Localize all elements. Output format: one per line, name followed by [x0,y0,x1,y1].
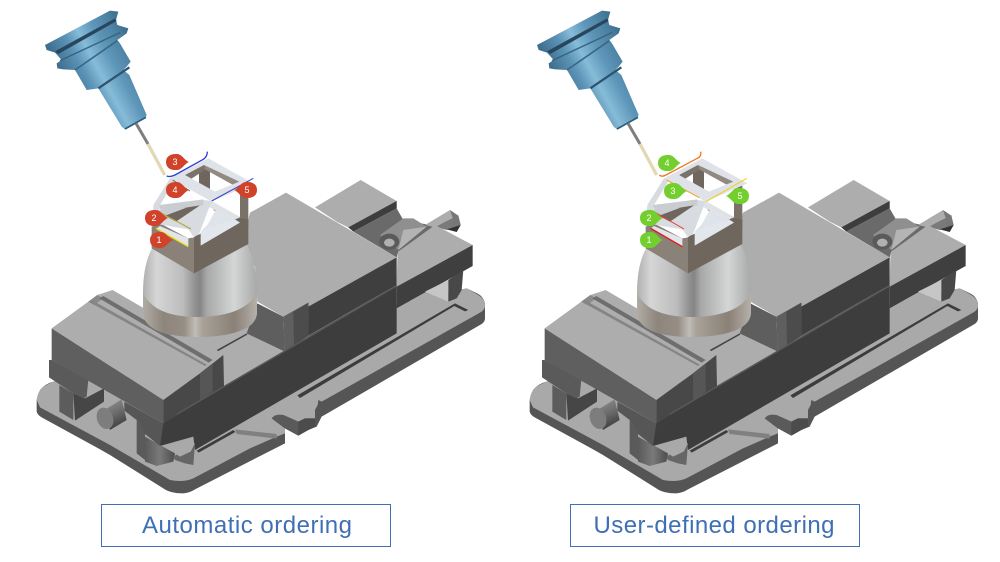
order badges: 3 [670,186,676,196]
workpiece dome [637,245,751,337]
order badges: 2 [151,213,157,223]
cutting tool [537,11,657,175]
order badges: 1 [156,235,162,245]
vise [37,180,485,493]
panel: automatic ordering [37,11,485,493]
toolpath wires [156,152,253,247]
label: automatic ordering [102,504,390,546]
label: user-defined ordering [570,504,860,546]
order badges: 4 [172,185,178,195]
order badges [640,155,749,248]
toolpath wires [651,152,747,247]
order badges: 5 [244,185,250,195]
order badges: 1 [646,235,652,245]
label: automatic ordering: Automatic ordering [142,512,352,539]
workpiece lattice [152,158,253,273]
cutting tool [45,11,165,175]
order badges: 4 [664,158,670,168]
order badges: 2 [646,213,652,223]
order badges: 3 [172,157,178,167]
order badges [145,154,257,248]
workpiece dome [143,245,257,337]
panel: user-defined ordering [530,11,978,493]
order badges: 5 [737,191,743,201]
vise [530,180,978,493]
label: user-defined ordering: User-defined ordering [594,512,834,539]
workpiece lattice [646,158,747,273]
